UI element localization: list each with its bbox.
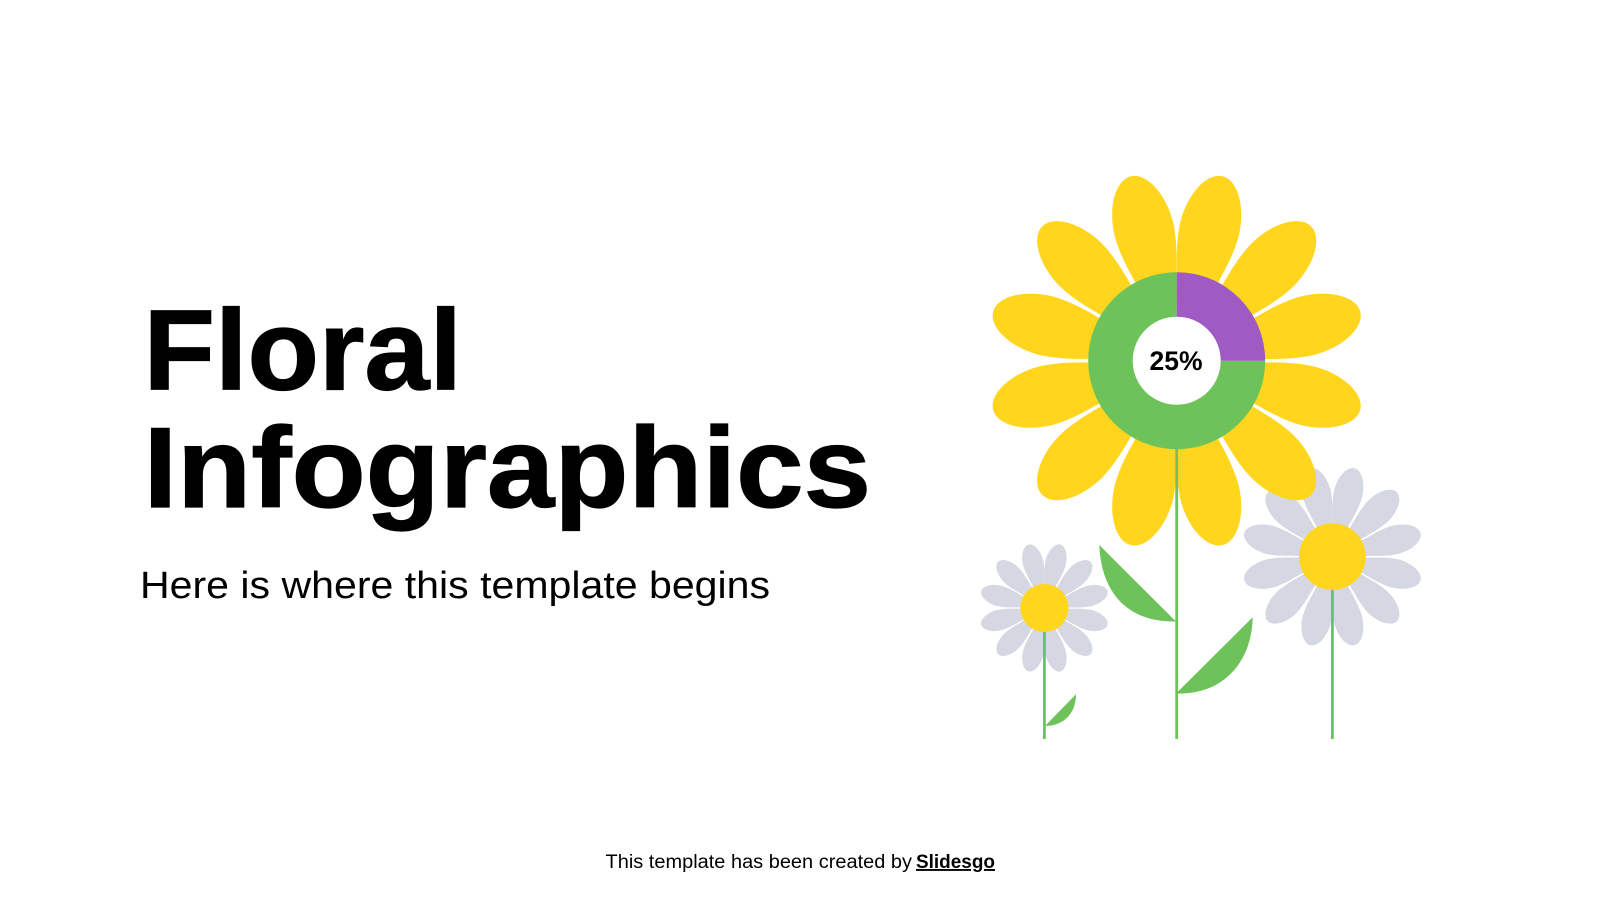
- large yellow flower: [985, 169, 1368, 739]
- medium daisy flower: [1241, 465, 1424, 739]
- yellow petals: [985, 169, 1368, 552]
- large flower stem: [1175, 440, 1178, 739]
- percentage label: 25%: [1150, 346, 1202, 376]
- donut chart: [1088, 272, 1265, 449]
- title: Infographics: [144, 405, 871, 532]
- left leaf: [1099, 545, 1176, 622]
- footer credit: This template has been created by: [606, 852, 913, 873]
- purple 25% segment: [1177, 272, 1265, 361]
- medium daisy centre: [1299, 523, 1366, 590]
- footer credit: Slidesgo: [916, 852, 995, 873]
- green remainder ring: [1088, 272, 1265, 449]
- small daisy leaf: [1045, 694, 1076, 726]
- small daisy flower: [979, 542, 1110, 739]
- right leaf: [1176, 617, 1253, 694]
- small daisy petals: [979, 542, 1110, 674]
- medium daisy petals: [1241, 465, 1424, 649]
- title: [144, 288, 871, 532]
- subtitle: Here is where this template begins: [140, 565, 770, 607]
- small daisy stem: [1043, 630, 1046, 739]
- small daisy centre: [1020, 584, 1068, 632]
- title: Floral: [144, 288, 462, 414]
- donut hole: [1132, 316, 1222, 406]
- medium daisy stem: [1331, 590, 1334, 739]
